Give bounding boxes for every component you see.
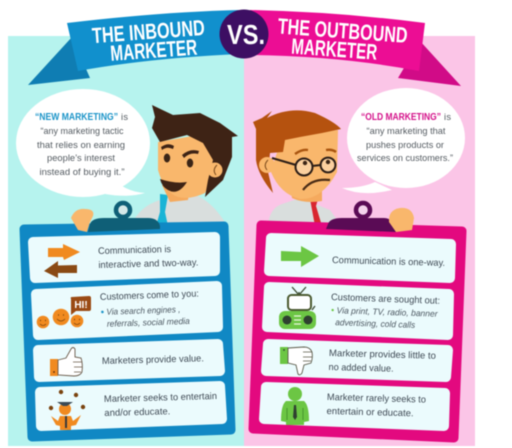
row: entertain or educate (40, 386, 222, 430)
text: little value: Marketer provides little to (329, 348, 436, 362)
text: customers sought out (330, 292, 440, 331)
speech bubble: new marketing: “NEW MARKETING” (35, 111, 118, 123)
heading: the inbound marketer (91, 15, 207, 67)
speech bubble: new marketing: that relies on earning (37, 140, 125, 150)
text: rarely seeks: Marketer rarely seeks to (327, 392, 426, 406)
speech bubble: old marketing: “OLD MARKETING” (361, 111, 441, 123)
text: marketer seeks: and/or educate. (104, 406, 170, 419)
icon: smiling customers (37, 296, 91, 328)
speech bubble: old marketing (342, 88, 465, 193)
text: marketer seeks: Marketer seeks to entertain (104, 391, 217, 405)
icon: green businessman (281, 387, 309, 425)
speech bubble: new marketing: “any marketing tactic (40, 126, 124, 136)
speech bubble: old marketing: services on customers.” (357, 153, 453, 163)
heading: the inbound marketer: MARKETER (109, 35, 198, 66)
row: one-way communication (269, 238, 451, 278)
text: rarely seeks: entertain or educate. (326, 406, 414, 419)
text: one-way: Communication is one-way. (332, 255, 445, 269)
row: provide value (38, 344, 220, 377)
text: customers sought out: Via print, TV, radio, banner (336, 305, 439, 319)
speech bubble: new marketing: instead of buying it.” (40, 167, 124, 177)
icon: smiling customers: HI! (74, 300, 88, 311)
text: customers come to you: Via search engines , (106, 304, 181, 317)
row: rarely entertains (264, 387, 445, 426)
row: two-way communication (33, 237, 215, 278)
character: outbound marketer (253, 110, 341, 226)
icon: one-way arrow (281, 246, 319, 267)
row: customers come to you (36, 286, 218, 335)
speech bubble: old marketing: “any marketing that (366, 126, 446, 136)
clipboard clip: inbound (88, 203, 160, 232)
text: customers come to you: Customers come to you: (100, 289, 199, 303)
hand: outbound (389, 208, 414, 232)
panel: inbound list (24, 203, 231, 437)
icon: thumbs down (280, 347, 312, 375)
panel: inbound background (8, 36, 244, 446)
hand: inbound (71, 209, 93, 232)
heading: the inbound marketer: THE INBOUND (91, 15, 206, 48)
panel: outbound background (244, 36, 475, 446)
text: customers come to you: referrals, social media (107, 316, 190, 329)
speech bubble: new marketing: people’s interest (47, 153, 115, 163)
icon: graduate juggling (49, 390, 85, 430)
text: communication (98, 243, 199, 271)
heading: the outbound marketer: MARKETER (291, 33, 378, 65)
text: communication: Communication is (98, 244, 171, 257)
banner: outbound (250, 10, 461, 86)
heading: the outbound marketer: THE OUTBOUND (277, 13, 408, 48)
text: marketers provide value: Marketers provide value. (102, 353, 204, 367)
text: customers sought out: advertising, cold calls (335, 317, 416, 330)
speech bubble: new marketing (16, 89, 150, 197)
heading: the outbound marketer (276, 13, 408, 67)
speech bubble: old marketing: pushes products or (366, 140, 444, 150)
row: customers sought out (267, 287, 449, 335)
text: marketer seeks (104, 391, 217, 419)
text: communication: interactive and two-way. (98, 257, 199, 271)
icon: tv and radio (279, 287, 316, 329)
icon: thumbs up (50, 348, 82, 376)
panel: outbound list (253, 203, 462, 438)
badge: VS (220, 10, 268, 58)
badge: VS: VS. (227, 19, 265, 50)
speech bubble: old marketing: is (444, 112, 451, 122)
speech bubble: new marketing: is (121, 112, 128, 122)
banner: inbound (28, 10, 240, 85)
icon: two-way arrows (44, 244, 80, 278)
text: customers sought out: Customers are sought out: (331, 292, 440, 307)
clipboard clip: outbound (326, 203, 396, 232)
text: little value: no added value. (328, 362, 394, 375)
text: little value (328, 348, 436, 376)
row: little value (266, 344, 448, 377)
text: rarely seeks (326, 392, 426, 420)
character: inbound marketer (132, 105, 238, 226)
text: customers come to you (100, 289, 200, 329)
